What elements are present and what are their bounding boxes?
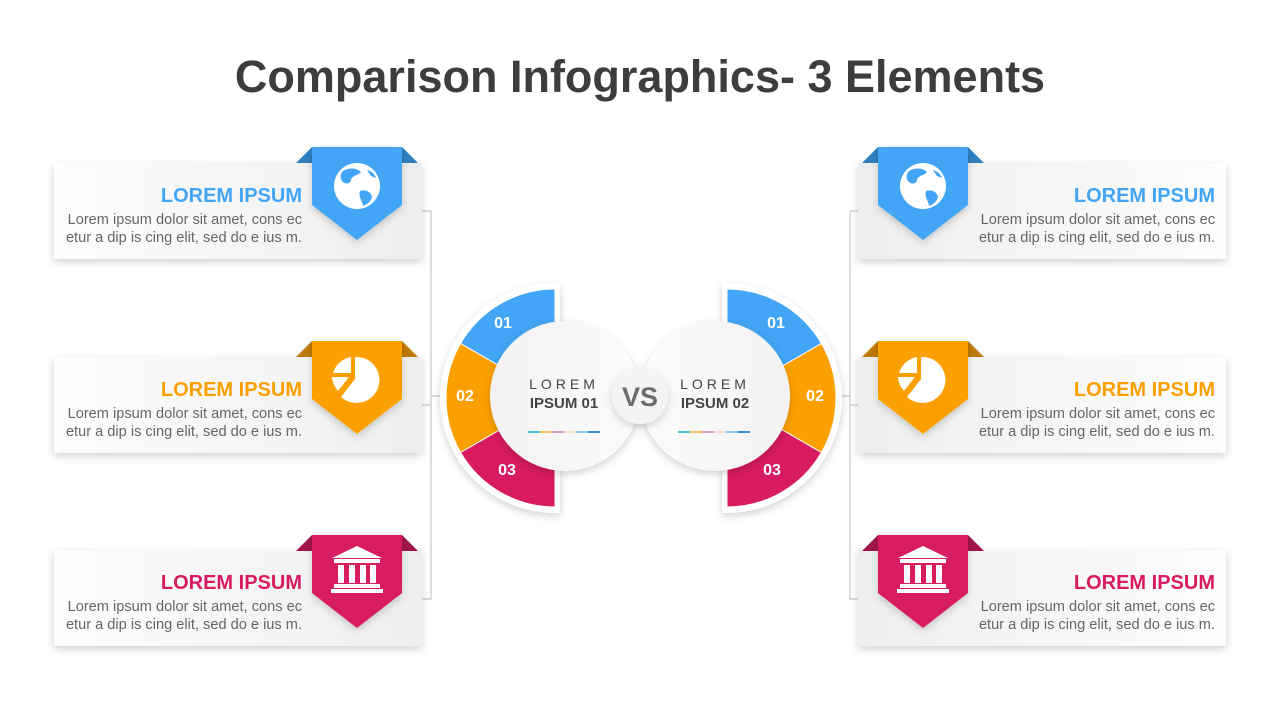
inner circle left: IPSUM 01	[530, 395, 598, 412]
chart: right half circle: 01	[767, 315, 785, 332]
VS badge: VS	[622, 382, 658, 412]
panel: right card 2: Lorem ipsum dolor sit amet, cons ec	[981, 406, 1215, 422]
panel: right card 3	[858, 550, 1226, 646]
chart: left half circle: 02	[456, 388, 474, 405]
panel: right card 1: LOREM IPSUM	[1074, 185, 1215, 207]
chart: left half circle	[440, 283, 560, 513]
panel: left card 3	[54, 550, 422, 646]
panel: left card 2: Lorem ipsum dolor sit amet, cons ec	[68, 406, 302, 422]
panel: left card 1: etur a dip is cing elit, sed do e ius m.	[66, 230, 302, 246]
chart: right half circle	[722, 283, 842, 513]
connector lines left	[422, 211, 442, 599]
icon: pie tag right	[862, 341, 984, 434]
inner circle right: LOREM	[680, 376, 750, 392]
icon: bank tag right	[862, 535, 984, 628]
panel: right card 3: Lorem ipsum dolor sit amet, cons ec	[981, 599, 1215, 615]
panel: right card 3: etur a dip is cing elit, sed do e ius m.	[979, 617, 1215, 633]
inner circle right: IPSUM 02	[681, 395, 749, 412]
panel: left card 1: Lorem ipsum dolor sit amet, cons ec	[68, 212, 302, 228]
inner circle left: LOREM	[529, 376, 599, 392]
panel: right card 2: etur a dip is cing elit, sed do e ius m.	[979, 424, 1215, 440]
panel: right card 1: etur a dip is cing elit, sed do e ius m.	[979, 230, 1215, 246]
connector lines right	[838, 211, 858, 599]
panel: left card 3: Lorem ipsum dolor sit amet, cons ec	[68, 599, 302, 615]
chart: right half circle: 03	[763, 462, 781, 479]
panel: left card 3: etur a dip is cing elit, sed do e ius m.	[66, 617, 302, 633]
icon: globe tag right	[862, 147, 984, 240]
chart: right half circle: 02	[806, 388, 824, 405]
icon: pie tag left	[296, 341, 418, 434]
icon: globe tag left	[296, 147, 418, 240]
panel: right card 1: Lorem ipsum dolor sit amet, cons ec	[981, 212, 1215, 228]
panel: left card 2: LOREM IPSUM	[161, 379, 302, 401]
title: Comparison Infographics- 3 Elements	[235, 51, 1045, 102]
VS badge	[612, 368, 668, 424]
inner circle right	[640, 321, 790, 471]
panel: left card 3: LOREM IPSUM	[161, 572, 302, 594]
panel: left card 1: LOREM IPSUM	[161, 185, 302, 207]
chart: left half circle: 03	[498, 462, 516, 479]
icon: bank tag left	[296, 535, 418, 628]
panel: right card 2	[858, 357, 1226, 453]
panel: right card 2: LOREM IPSUM	[1074, 379, 1215, 401]
inner circle left	[490, 321, 640, 471]
panel: right card 1	[858, 163, 1226, 259]
panel: left card 2: etur a dip is cing elit, sed do e ius m.	[66, 424, 302, 440]
panel: left card 1	[54, 163, 422, 259]
chart: left half circle: 01	[494, 315, 512, 332]
panel: left card 2	[54, 357, 422, 453]
panel: right card 3: LOREM IPSUM	[1074, 572, 1215, 594]
